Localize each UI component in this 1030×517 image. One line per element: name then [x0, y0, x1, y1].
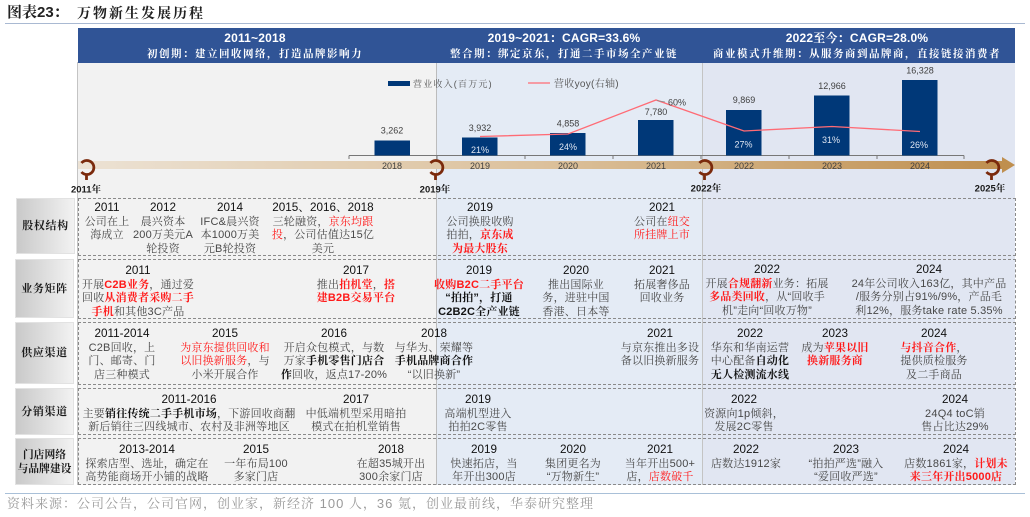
line chart: revenue yoy: 31% [822, 135, 840, 145]
entry 2018: 在超35城开出 [357, 458, 425, 470]
row label [16, 198, 75, 254]
entry 2023: 成为苹果以旧 [801, 342, 869, 354]
entry 2015 [224, 443, 288, 483]
entry 2011-2014: 2011-2014 [94, 327, 150, 340]
entry 2017 [306, 393, 406, 433]
timeline year labels [71, 182, 1006, 196]
entry 2019: 拍拍，京东成 [446, 229, 514, 241]
entry 2020: 务，进驻中国 [542, 292, 610, 304]
entry 2019: 2019 [466, 264, 492, 277]
row label [15, 438, 74, 485]
line chart: revenue yoy: 60% [668, 98, 686, 108]
header: 2011-2018 [147, 30, 363, 60]
entry 2021: 当年开出500+ [625, 458, 695, 470]
entry 2021: 2021 [649, 201, 675, 214]
bar chart: revenue: 4,858 [557, 118, 579, 128]
entry 2015-2018: 投，公司估值达15亿 [272, 229, 374, 241]
entry 2015-2018 [272, 201, 374, 255]
entry 2019 [450, 443, 518, 483]
entry 2024: 24Q4 toC销 [925, 408, 985, 420]
timeline year labels: 2019年 [420, 184, 451, 196]
entry 2024 [900, 327, 968, 381]
entry 2019: 年开出300店 [452, 471, 516, 483]
bar chart: revenue: 2018 [382, 161, 402, 171]
entry 2024: 售占比达29% [921, 421, 989, 433]
dashed box [78, 438, 1016, 485]
entry 2021: 2021 [649, 264, 675, 277]
entry 2017: 推出拍机堂，搭 [317, 279, 395, 291]
entry 2021: 备以旧换新服务 [621, 355, 699, 367]
entry 2019: 高端机型进入 [444, 408, 512, 420]
entry 2015: 2015 [212, 327, 238, 340]
entry 2021: 2021 [647, 327, 673, 340]
entry 2018: 手机品牌商合作 [395, 355, 473, 367]
entry 2024: 利12%，服务take rate 5.35% [855, 305, 1003, 317]
entry 2011: 2011 [125, 264, 151, 277]
row: business matrix [15, 259, 1016, 319]
header: 2019-2021 [450, 30, 678, 60]
entry 2021 [625, 443, 695, 485]
entry 2014 [200, 201, 260, 255]
entry 2012: 2012 [150, 201, 176, 214]
bar chart: revenue [349, 66, 964, 171]
entry 2015: 多家门店 [234, 471, 278, 483]
entry 2024: /服务分别占91%/9%，产品毛 [856, 291, 1002, 303]
entry 2022: 中心配备自动化 [711, 355, 789, 367]
row: supply channels [15, 322, 1016, 385]
row label [15, 322, 74, 384]
entry 2014: 2014 [217, 201, 243, 214]
entry 2013-2014: 2013-2014 [119, 443, 175, 456]
entry 2022: 2022 [737, 327, 763, 340]
panel: 2011-2018 background [77, 62, 436, 485]
entry 2020: 2020 [563, 264, 589, 277]
entry 2019 [444, 393, 512, 433]
line chart: revenue yoy: 26% [910, 140, 928, 150]
entry 2011: 回收从消费者采购二手 [82, 292, 194, 304]
entry 2012: 晨兴资本 [141, 216, 185, 228]
entry 2015-2018: 三轮融资，京东均跟 [273, 216, 373, 228]
entry 2017 [317, 264, 395, 304]
entry 2022: 多品类回收，从“回收手 [709, 291, 825, 303]
header: 2019-2021: 整合期：绑定京东，打通二手市场全产业链 [450, 48, 678, 60]
entry 2018 [357, 443, 425, 483]
entry 2019 [434, 264, 524, 318]
entry 2016: 开启众包模式，与数 [284, 342, 384, 354]
entry 2023: 换新服务商 [807, 355, 863, 367]
title [7, 4, 205, 21]
entry 2020: 推出国际业 [548, 279, 604, 291]
entry 2021: 2021 [647, 443, 673, 456]
entry 2022: 资源向1p倾斜， [704, 408, 784, 420]
entry 2022: 发展2C零售 [714, 421, 774, 433]
entry 2019: C2B2C全产业链 [438, 306, 520, 318]
line chart: revenue yoy [471, 98, 928, 155]
legend: 营业收入(百万元) [413, 78, 493, 89]
entry 2023 [809, 443, 883, 485]
entry 2011-2016 [83, 393, 295, 433]
entry 2024: 24年公司收入163亿，其中产品 [852, 278, 1006, 290]
entry 2018: 300余家门店 [359, 471, 423, 483]
entry 2015-2018: 美元 [312, 243, 334, 255]
line chart: revenue yoy: 27% [734, 140, 753, 150]
entry 2011-2014: C2B回收，上 [89, 342, 155, 354]
row label: 分销渠道 [21, 406, 68, 418]
line chart: revenue yoy: 24% [559, 142, 577, 152]
bar chart: revenue: 9,869 [733, 95, 755, 105]
panel: period backgrounds [77, 62, 1015, 485]
entry 2013-2014: 探索店型、选址，确定在 [85, 458, 209, 470]
entry 2020: 香港、日本等 [542, 306, 610, 318]
bar chart: revenue: 2021 [646, 161, 666, 171]
entry 2024: 提供质检服务 [900, 355, 968, 367]
bar chart: revenue: 2019 [470, 161, 490, 171]
entry 2024: 店数1861家，计划未 [904, 458, 1008, 470]
entry 2015: 2015 [243, 443, 269, 456]
entry 2011-2016: 新后销往三四线城市、农村及非洲等地区 [88, 421, 290, 433]
entry 2011-2016: 主要销往传统二手手机市场，下游回收商翻 [83, 408, 295, 420]
entry 2020: 集团更名为 [545, 458, 601, 470]
entry 2024: 与抖音合作， [900, 342, 968, 354]
entry 2019: “拍拍”，打通 [445, 292, 513, 304]
bar chart: revenue: 2022 [734, 161, 754, 171]
title: 图表23： [7, 4, 69, 21]
entry 2019 [446, 201, 514, 255]
row label [15, 259, 74, 318]
entry 2017: 中低端机型采用暗拍 [306, 408, 406, 420]
entry 2011: 海成立 [90, 229, 124, 241]
dashed box [78, 388, 1016, 435]
entry 2011 [85, 201, 129, 241]
entry 2011: 手机和其他3C产品 [92, 306, 184, 318]
entry 2021: 公司在纽交 [634, 216, 690, 228]
entry 2016 [281, 327, 387, 381]
entry 2017: 模式在拍机堂销售 [311, 421, 401, 433]
bar chart: revenue: 7,780 [645, 107, 667, 117]
header: 2019-2021: 2019~2021：CAGR=33.6% [488, 30, 640, 44]
bar chart: revenue: 3,262 [381, 126, 403, 136]
entry 2022: 店数达1912家 [711, 458, 781, 470]
entry 2021: 所挂牌上市 [634, 229, 690, 241]
row: store network and brand [15, 438, 1016, 485]
entry 2022: 2022 [731, 393, 757, 406]
dashed box [78, 198, 1016, 256]
panel: 2022-present background [702, 62, 1015, 485]
entry 2024: 来三年开出5000店 [910, 471, 1002, 483]
bar chart: revenue: 2023 [822, 161, 842, 171]
header band [78, 28, 1015, 62]
entry 2019: 快速拓店，当 [450, 458, 518, 470]
entry 2021: 回收业务 [640, 292, 684, 304]
entry 2022: 开展合规翻新业务：拓展 [705, 278, 829, 290]
entry 2018: 2018 [421, 327, 447, 340]
entry 2020 [545, 443, 601, 485]
entry 2012: 轮投资 [146, 243, 180, 255]
entry 2013-2014: 高势能商场开小铺的战略 [85, 471, 209, 483]
header: 2022-present [713, 30, 1001, 60]
bar chart: revenue: 16,328 [906, 66, 934, 76]
entry 2015-2018: 2015、2016、2018 [272, 201, 374, 214]
entry 2019: 2019 [471, 443, 497, 456]
entry 2015: 一年布局100 [224, 458, 288, 470]
bar chart: revenue: 3,932 [469, 123, 491, 133]
entry 2021 [634, 264, 690, 304]
entry 2015: 小米开展合作 [191, 369, 259, 381]
panel: 2019-2021 background [436, 62, 702, 485]
entry 2021: 拓展奢侈品 [634, 279, 690, 291]
dashed box [78, 322, 1016, 385]
entry 2019: 公司换股收购 [446, 216, 514, 228]
entry 2011-2014: 店三种模式 [94, 369, 150, 381]
entry 2017: 2017 [343, 264, 369, 277]
entry 2021: 店，店数破千 [626, 471, 694, 483]
entry 2022 [705, 263, 829, 317]
entry 2011: 2011 [94, 201, 120, 214]
entry 2016: 作回收，返点17-20% [281, 369, 387, 381]
entry 2022: 华东和华南运营 [711, 342, 789, 354]
entry 2018 [395, 327, 473, 381]
entry 2019: 为最大股东 [452, 243, 508, 255]
row label: 股权结构 [22, 220, 69, 232]
entry 2015: 以旧换新服务，与 [180, 355, 270, 367]
entry 2024: 2024 [916, 263, 942, 276]
entry 2015: 为京东提供回收和 [180, 342, 270, 354]
entry 2019: 2019 [465, 393, 491, 406]
bar chart: revenue: 2020 [558, 161, 578, 171]
entry 2023 [801, 327, 869, 367]
row label: 业务矩阵 [21, 282, 68, 294]
entry 2019: 2019 [467, 201, 493, 214]
entry 2024: 及二手商品 [906, 369, 962, 381]
entry 2024: 2024 [921, 327, 947, 340]
entry 2021 [621, 327, 699, 367]
entry 2014: 本1000万美 [201, 229, 259, 241]
entry 2012: 200万美元A [133, 229, 193, 241]
entry 2024 [904, 443, 1008, 485]
entry 2011: 公司在上 [85, 216, 129, 228]
entry 2024 [852, 263, 1006, 317]
entry 2018: 2018 [378, 443, 404, 456]
row: equity structure [16, 198, 1016, 256]
source note: 资料来源：公司公告，公司官网，创业家，新经济 100 人，36 氪，创业最前线，华泰研究整理 [7, 496, 594, 511]
header: 2022-present: 2022至今：CAGR=28.0% [786, 30, 928, 44]
bar chart: revenue: 12,966 [818, 81, 846, 91]
entry 2021: 与京东推出多设 [621, 342, 699, 354]
entry 2022 [711, 443, 781, 471]
entry 2014: IFC&晨兴资 [200, 216, 260, 228]
entry 2017: 建B2B交易平台 [317, 292, 395, 304]
entry 2012 [133, 201, 193, 255]
entry 2015 [180, 327, 270, 381]
entry 2017: 2017 [343, 393, 369, 406]
entry 2023: “拍拍严选”融入 [809, 458, 883, 470]
entry 2023: “爱回收严选” [814, 471, 878, 483]
entry 2020: “万物新生” [547, 471, 599, 483]
entry 2013-2014 [85, 443, 209, 483]
timeline year labels: 2022年 [691, 182, 722, 194]
timeline year labels: 2011年 [71, 184, 102, 196]
entry 2011: 开展C2B业务，通过爱 [82, 279, 194, 291]
timeline year labels: 2025年 [975, 182, 1006, 194]
header: 2011-2018: 初创期：建立回收网络，打造品牌影响力 [147, 48, 363, 60]
entry 2021 [634, 201, 690, 241]
entry 2011-2016: 2011-2016 [161, 393, 217, 406]
row label: 供应渠道 [21, 347, 68, 359]
timeline markers [82, 160, 999, 180]
entry 2020 [542, 264, 610, 318]
row label: 门店网络 [23, 448, 66, 460]
bar chart: revenue: 2024 [910, 161, 930, 171]
entry 2022: 2022 [754, 263, 780, 276]
title: 万物新生发展历程 [77, 5, 205, 21]
entry 2018: “以旧换新” [408, 369, 460, 381]
entry 2022: 2022 [733, 443, 759, 456]
entry 2018: 与华为、荣耀等 [395, 342, 473, 354]
dashed box [78, 259, 1016, 319]
row label: 与品牌建设 [18, 462, 71, 474]
entry 2022 [711, 327, 789, 381]
entry 2019: 拍拍2C零售 [448, 421, 508, 433]
entry 2023: 2023 [833, 443, 859, 456]
entry 2024 [921, 393, 989, 433]
line chart: revenue yoy: 21% [471, 145, 489, 155]
entry 2024: 2024 [943, 443, 969, 456]
entry 2023: 2023 [822, 327, 848, 340]
entry 2020: 2020 [560, 443, 586, 456]
entry 2016: 2016 [321, 327, 347, 340]
timeline arrow [78, 157, 1015, 173]
entry 2014: 元B轮投资 [204, 243, 256, 255]
entry 2022 [704, 393, 784, 433]
entry 2016: 万家手机零售门店合 [284, 355, 384, 367]
entry 2011-2014 [88, 327, 156, 381]
entry 2011 [82, 264, 194, 318]
entry 2022: 机”走向“回收万物” [722, 305, 812, 317]
entry 2022: 无人检测流水线 [711, 369, 789, 381]
entry 2024: 2024 [942, 393, 968, 406]
entry 2011-2014: 门、邮寄、门 [88, 355, 156, 367]
header: 2011-2018: 2011~2018 [224, 30, 286, 44]
legend [388, 77, 619, 90]
legend: 营收yoy(右轴) [554, 77, 619, 90]
row: distribution channels [15, 388, 1016, 435]
row label [15, 388, 74, 435]
entry 2019: 收购B2C二手平台 [434, 279, 524, 291]
header: 2022-present: 商业模式升维期：从服务商到品牌商，直接链接消费者 [713, 48, 1001, 60]
